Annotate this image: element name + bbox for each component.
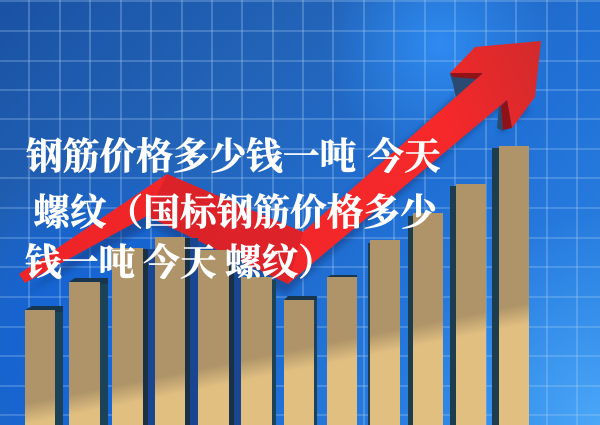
- bars: [25, 146, 529, 425]
- red arrow: [19, 41, 541, 284]
- arrow shadow: [28, 70, 530, 294]
- title text: 螺纹（国标钢筋价格多少: [33, 192, 437, 233]
- title text: 钱一吨 今天 螺纹）: [25, 242, 335, 283]
- arrow notch shading: [450, 74, 507, 131]
- bar shadows: [25, 148, 499, 425]
- title text: 钢筋价格多少钱一吨 今天: [26, 136, 441, 177]
